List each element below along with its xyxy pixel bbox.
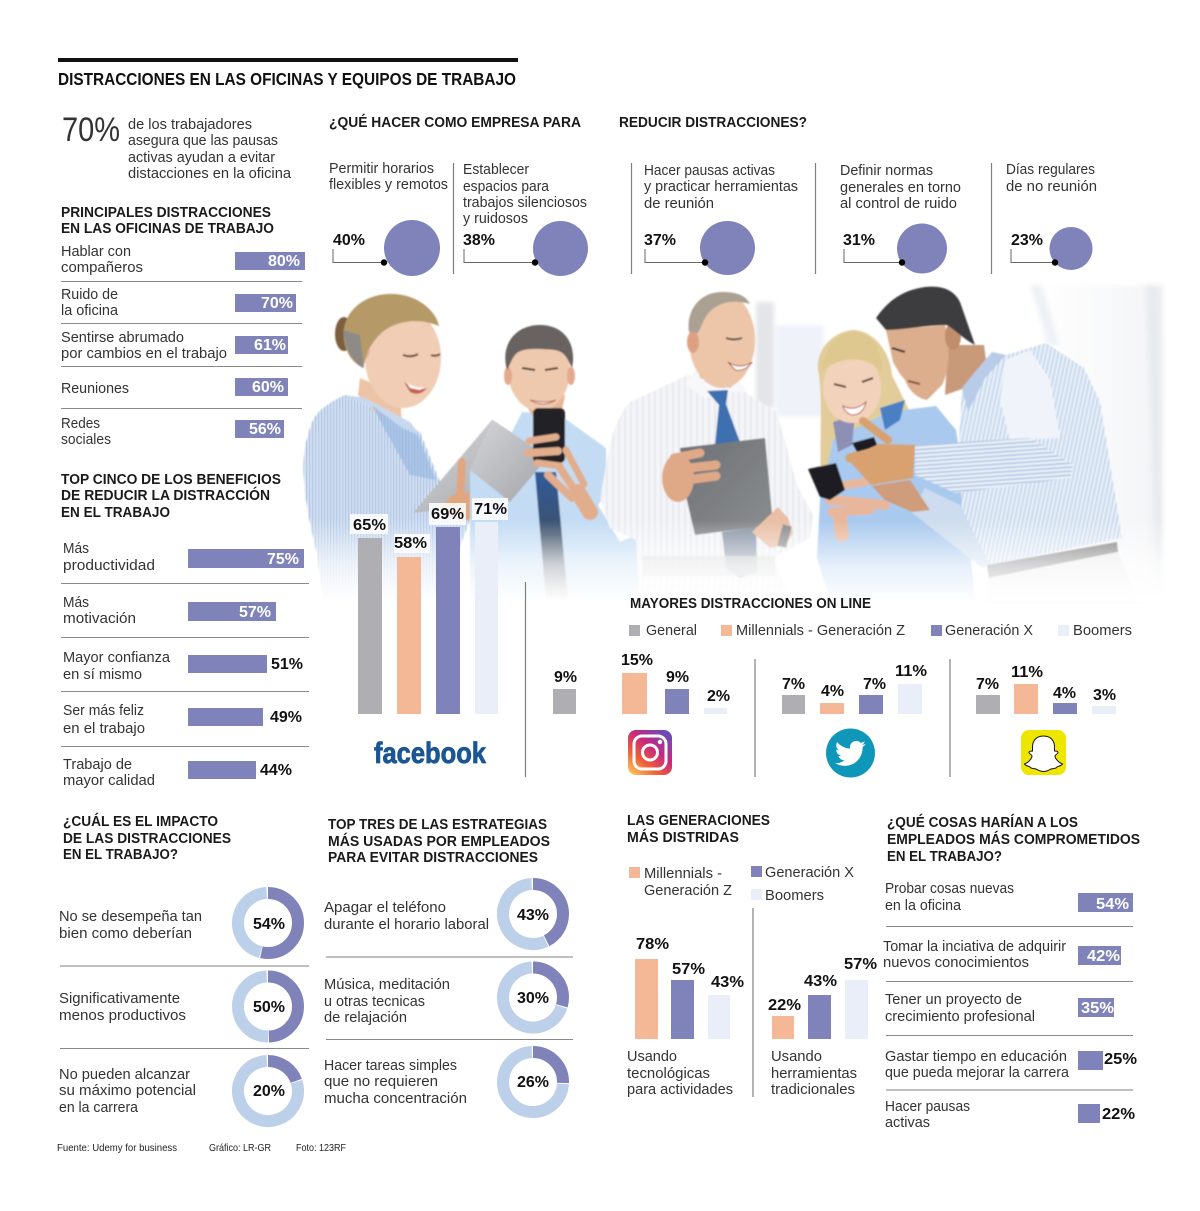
row: más productividad 75%: 75% [267, 551, 299, 568]
row: sentirse abrumado 61% [61, 329, 288, 362]
heading: EMPLEADOS MÁS COMPROMETIDOS [887, 831, 1140, 848]
chart: twitter bars [782, 663, 927, 714]
icon: snapchat [1021, 730, 1066, 775]
row: más productividad 75% [63, 540, 304, 574]
person: woman with tablet [303, 294, 548, 600]
row: hablar con compañeros 80%: compañeros [61, 259, 143, 276]
heading [63, 813, 231, 863]
row: 25% [885, 1048, 1137, 1081]
item: pausas activas 37%: y practicar herramientas [644, 178, 798, 195]
item: días sin reunión 23% [1006, 161, 1097, 270]
row: 22%: 22% [1102, 1106, 1135, 1123]
row: 22% [885, 1098, 1135, 1131]
item: horarios flexibles 40%: flexibles y remotos [329, 176, 448, 193]
row: reuniones 60%: 60% [252, 379, 284, 396]
chart: usando herramientas tradicionales: 43% [804, 973, 837, 990]
chart: usando tecnológicas: tecnológicas [627, 1065, 710, 1082]
bar: general 65% [350, 514, 388, 714]
item: espacios silenciosos 38%: espacios para [463, 178, 550, 195]
chart: twitter bars: 7% [863, 676, 886, 693]
heading: EN EL TRABAJO [61, 505, 170, 521]
row: 35%: 35% [1081, 1000, 1114, 1017]
heading: EN LAS OFICINAS DE TRABAJO [61, 221, 274, 237]
footer credits: Gráfico: LR-GR [209, 1142, 271, 1154]
chart: usando herramientas tradicionales: 57% [844, 956, 877, 973]
chart: snapchat bars [976, 664, 1116, 714]
heading: DE LAS DISTRACCIONES [63, 831, 231, 847]
row: redes sociales 56%: sociales [61, 431, 111, 448]
heading: REDUCIR DISTRACCIONES? [619, 115, 807, 131]
footer credits [57, 1142, 346, 1154]
heading: DE REDUCIR LA DISTRACCIÓN [61, 486, 270, 504]
item: normas de ruido 31%: Definir normas [840, 162, 933, 179]
row: 26%: 26% [517, 1074, 549, 1091]
chart: instagram bars: 9% [666, 669, 689, 686]
row: 42%: Tomar la inciativa de adquirir [883, 938, 1066, 955]
row: 20%: en la carrera [59, 1099, 139, 1116]
row: 35% [885, 991, 1114, 1025]
chart: twitter bars: 7% [782, 676, 805, 693]
row: 20%: No pueden alcanzar [59, 1066, 190, 1083]
row: 30%: de relajación [324, 1009, 407, 1026]
title: DISTRACCIONES EN LAS OFICINAS Y EQUIPOS DE TRABAJO [58, 69, 516, 89]
row: 50% [59, 976, 298, 1036]
panel: mayores distracciones on line [553, 596, 1132, 778]
item: espacios silenciosos 38%: Establecer [463, 161, 529, 178]
row: 43% [324, 874, 573, 954]
row: 20%: su máximo potencial [59, 1082, 196, 1099]
row: 50%: 50% [253, 999, 285, 1016]
chart: instagram bars [553, 652, 730, 714]
photo: five colleagues with devices [296, 285, 1171, 602]
bar: boomers 71% [472, 498, 508, 714]
row: 22%: Hacer pausas [885, 1098, 970, 1115]
item: pausas activas 37%: Hacer pausas activas [644, 162, 775, 179]
item: normas de ruido 31%: generales en torno [840, 179, 961, 196]
chart: twitter bars: 11% [895, 663, 927, 680]
row: 35%: Tener un proyecto de [885, 991, 1022, 1008]
legend: Generación X [765, 864, 854, 881]
legend: Boomers [765, 887, 824, 904]
row: 54% [885, 880, 1133, 914]
panel: estrategias de empleados [324, 817, 573, 1114]
item: normas de ruido 31%: 31% [843, 232, 875, 249]
item: espacios silenciosos 38%: 38% [463, 232, 495, 249]
row: 25%: 25% [1104, 1051, 1137, 1068]
row: redes sociales 56%: Redes [61, 415, 100, 432]
stat callout: 70%: de los trabajadores [128, 116, 252, 133]
person: man with smartphone [470, 325, 640, 600]
footer credits: Fuente: Udemy for business [57, 1142, 177, 1154]
chart: twitter bars: 4% [821, 683, 844, 700]
row: 25%: Gastar tiempo en educación [885, 1048, 1067, 1065]
stat callout: 70% [62, 111, 292, 182]
item: horarios flexibles 40%: Permitir horarios [329, 160, 434, 177]
window background [756, 285, 1163, 597]
heading [61, 205, 274, 237]
row: 22%: activas [885, 1114, 930, 1131]
heading [328, 817, 550, 866]
item: días sin reunión 23%: 23% [1011, 232, 1043, 249]
row: mayor confianza 51% [63, 649, 303, 683]
row: 30%: 30% [517, 990, 549, 1007]
row: 25%: que pueda mejorar la carrera [885, 1064, 1070, 1081]
person: man with tablet [600, 292, 813, 600]
panel: impacto de las distracciones [59, 813, 309, 1129]
panel: generaciones más distraídas [627, 813, 877, 1098]
chart: snapchat bars: 7% [976, 676, 999, 693]
row: mayor calidad 44%: 44% [260, 762, 292, 779]
row: 35%: crecimiento profesional [885, 1008, 1035, 1025]
title [58, 58, 518, 89]
photo fade to white [296, 520, 1171, 602]
footer credits: Foto: 123RF [296, 1142, 346, 1154]
heading: TOP TRES DE LAS ESTRATEGIAS [328, 817, 547, 833]
row: 42%: 42% [1087, 948, 1120, 965]
heading: ¿CUÁL ES EL IMPACTO [63, 813, 218, 830]
chart: instagram bars: 15% [621, 652, 653, 669]
row: 30%: u otras tecnicas [324, 993, 425, 1010]
heading [329, 114, 807, 131]
legend: Millennials - [644, 865, 722, 882]
row: mayor confianza 51%: Mayor confianza [63, 649, 171, 666]
panel: facebook bars [350, 498, 508, 770]
row: mayor confianza 51%: en sí mismo [63, 666, 142, 683]
person: blonde woman with smartphone [808, 330, 975, 600]
row: 43%: 43% [517, 907, 549, 924]
row: 26% [324, 1050, 565, 1114]
chart: snapchat bars: 11% [1011, 664, 1043, 681]
chart: usando herramientas tradicionales: herramientas [771, 1065, 857, 1082]
row: 54%: No se desempeña tan [59, 908, 202, 925]
heading: ¿QUÉ COSAS HARÍAN A LOS [887, 814, 1078, 831]
chart: snapchat bars: 3% [1093, 687, 1116, 704]
heading: TOP CINCO DE LOS BENEFICIOS [61, 472, 281, 488]
panel: empleados más comprometidos [883, 814, 1140, 1131]
item: pausas activas 37% [644, 162, 798, 275]
bar: general 65%: 65% [353, 517, 386, 534]
person: man pointing, in striped shirt [847, 287, 1139, 602]
chart: usando tecnológicas: 43% [711, 974, 744, 991]
bar: boomers 71%: 71% [474, 501, 507, 518]
item: espacios silenciosos 38% [463, 161, 588, 276]
row: redes sociales 56% [61, 415, 284, 448]
bar: millennials 58%: 58% [394, 535, 427, 552]
item: horarios flexibles 40%: 40% [333, 232, 365, 249]
legend [629, 864, 854, 904]
chart: snapchat bars: 4% [1053, 685, 1076, 702]
row: mayor confianza 51%: 51% [271, 656, 303, 673]
heading: MÁS USADAS POR EMPLEADOS [328, 833, 550, 850]
bar: millennials 58% [394, 534, 430, 714]
heading: MAYORES DISTRACCIONES ON LINE [630, 596, 871, 612]
chart: usando tecnológicas: 57% [672, 961, 705, 978]
icon: twitter [826, 728, 875, 778]
row: ruido de la oficina 70% [61, 286, 296, 319]
row: sentirse abrumado 61%: por cambios en el trabajo [61, 345, 227, 362]
row: mayor calidad 44% [63, 756, 292, 789]
chart: usando tecnológicas: para actividades [627, 1081, 733, 1098]
heading [61, 472, 281, 521]
legend [629, 622, 1132, 639]
row: 30% [324, 960, 571, 1035]
bar: generación X 69% [429, 503, 466, 714]
row: ser más feliz 49% [63, 702, 302, 737]
row: 26%: Hacer tareas simples [324, 1057, 457, 1074]
item: días sin reunión 23%: Días regulares [1006, 161, 1095, 178]
item: pausas activas 37%: 37% [644, 232, 676, 249]
row: 54%: 54% [1096, 896, 1129, 913]
row: ser más feliz 49%: en el trabajo [63, 720, 145, 737]
heading: EN EL TRABAJO? [887, 849, 1002, 865]
chart: usando herramientas tradicionales: 22% [768, 997, 801, 1014]
row: sentirse abrumado 61%: 61% [254, 337, 286, 354]
row: 20%: 20% [253, 1083, 285, 1100]
chart: usando herramientas tradicionales: Usando [771, 1048, 822, 1065]
row: 30%: Música, meditación [324, 976, 450, 993]
row: más motivación 57%: motivación [63, 610, 136, 627]
row: 20% [59, 1053, 306, 1129]
item: espacios silenciosos 38%: y ruidosos [463, 210, 528, 227]
panel: qué hacer como empresa [329, 114, 1097, 276]
heading: PRINCIPALES DISTRACCIONES [61, 205, 271, 221]
chart: instagram bars: 2% [707, 688, 730, 705]
stat callout: 70%: activas ayudan a evitar [128, 149, 275, 166]
row: mayor calidad 44%: mayor calidad [63, 772, 155, 789]
row: hablar con compañeros 80%: Hablar con [61, 243, 131, 260]
heading: ¿QUÉ HACER COMO EMPRESA PARA [329, 114, 581, 131]
stat callout: 70%: 70% [62, 111, 120, 149]
legend: Millennials - Generación Z [736, 622, 905, 639]
row: 26%: que no requieren [324, 1073, 438, 1090]
row: más motivación 57%: Más [63, 594, 89, 611]
row: más productividad 75%: productividad [63, 557, 155, 574]
row: 42% [883, 938, 1121, 971]
heading [887, 814, 1140, 865]
item: pausas activas 37%: de reunión [644, 195, 714, 212]
row: redes sociales 56%: 56% [249, 421, 281, 438]
heading: EN EL TRABAJO? [63, 847, 178, 863]
row: 54%: en la oficina [885, 897, 962, 914]
row: más motivación 57%: 57% [239, 604, 271, 621]
item: días sin reunión 23%: de no reunión [1006, 178, 1097, 195]
row: mayor calidad 44%: Trabajo de [63, 756, 132, 773]
heading: PARA EVITAR DISTRACCIONES [328, 850, 538, 866]
heading [627, 813, 770, 846]
row: hablar con compañeros 80% [61, 243, 305, 276]
row: ruido de la oficina 70%: la oficina [61, 302, 119, 319]
row: sentirse abrumado 61%: Sentirse abrumado [61, 329, 184, 346]
icon: instagram [628, 730, 672, 775]
stat callout: 70%: distacciones en la oficina [128, 165, 292, 182]
row: 54%: bien como deberían [59, 925, 192, 942]
chart: instagram bars: 9% [554, 669, 577, 686]
row: 50%: menos productivos [59, 1007, 186, 1024]
legend: Generación X [945, 622, 1033, 639]
legend: General [646, 622, 697, 639]
chart: usando tecnológicas [627, 936, 744, 1098]
row: 43%: durante el horario laboral [324, 916, 489, 933]
chart: usando herramientas tradicionales [768, 956, 877, 1098]
chart: usando herramientas tradicionales: tradicionales [771, 1081, 855, 1098]
row: ser más feliz 49%: 49% [270, 709, 302, 726]
row: reuniones 60% [61, 378, 288, 397]
stat callout: 70%: asegura que las pausas [128, 132, 278, 149]
row: más motivación 57% [63, 594, 276, 627]
panel: beneficios de reducir la distracción [61, 472, 309, 789]
legend: Boomers [1073, 622, 1132, 639]
item: horarios flexibles 40% [329, 160, 448, 276]
row: ser más feliz 49%: Ser más feliz [63, 702, 144, 719]
logo: facebook: facebook [374, 737, 486, 770]
row: ruido de la oficina 70%: Ruido de [61, 286, 118, 303]
row: 43%: Apagar el teléfono [324, 899, 446, 916]
heading: MÁS DISTRIDAS [627, 829, 739, 846]
row: reuniones 60%: Reuniones [61, 380, 129, 397]
row: hablar con compañeros 80%: 80% [268, 253, 300, 270]
legend: Generación Z [644, 882, 732, 899]
item: normas de ruido 31%: al control de ruido [840, 195, 957, 212]
row: 50%: Significativamente [59, 990, 180, 1007]
chart: usando tecnológicas: Usando [627, 1048, 677, 1065]
item: espacios silenciosos 38%: trabajos silenciosos [463, 194, 587, 211]
row: 54%: Probar cosas nuevas [885, 880, 1014, 897]
row: ruido de la oficina 70%: 70% [261, 295, 293, 312]
row: más productividad 75%: Más [63, 540, 89, 557]
row: 26%: mucha concentración [324, 1090, 467, 1107]
chart: usando tecnológicas: 78% [636, 936, 669, 953]
row: 42%: nuevos conocimientos [883, 954, 1029, 971]
panel: principales distracciones [61, 205, 305, 448]
heading: LAS GENERACIONES [627, 813, 770, 829]
item: normas de ruido 31% [840, 162, 961, 274]
row: 54%: 54% [253, 916, 285, 933]
row: 54% [59, 886, 305, 960]
bar: generación X 69%: 69% [431, 506, 464, 523]
